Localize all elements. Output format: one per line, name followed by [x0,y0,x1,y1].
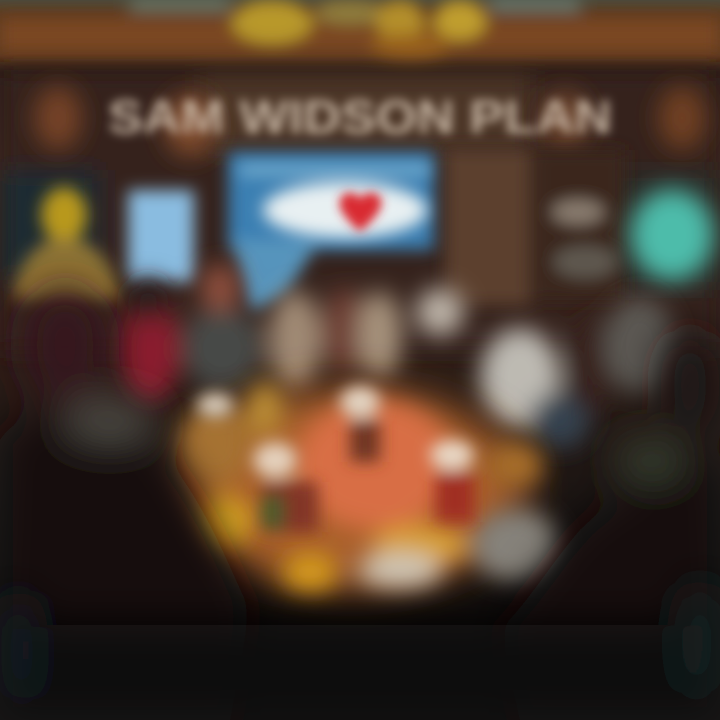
drinks on the table [197,386,474,532]
back wall [0,70,720,350]
yellow statue [15,187,122,300]
dark foreground floor [0,580,720,720]
back row of people [120,264,676,448]
teal statue [630,189,714,281]
blurred wall heading: SAM WIDSON PLAN [108,90,612,143]
foreground silhouette right [500,329,720,720]
foreground silhouette left [0,287,250,720]
table with orange centre [175,382,559,592]
presentation screen with red heart [228,152,434,312]
ceiling band with lights [0,0,720,58]
wall sconces [34,86,706,157]
left side screen [128,190,194,282]
wood panel and shelves [445,150,625,305]
